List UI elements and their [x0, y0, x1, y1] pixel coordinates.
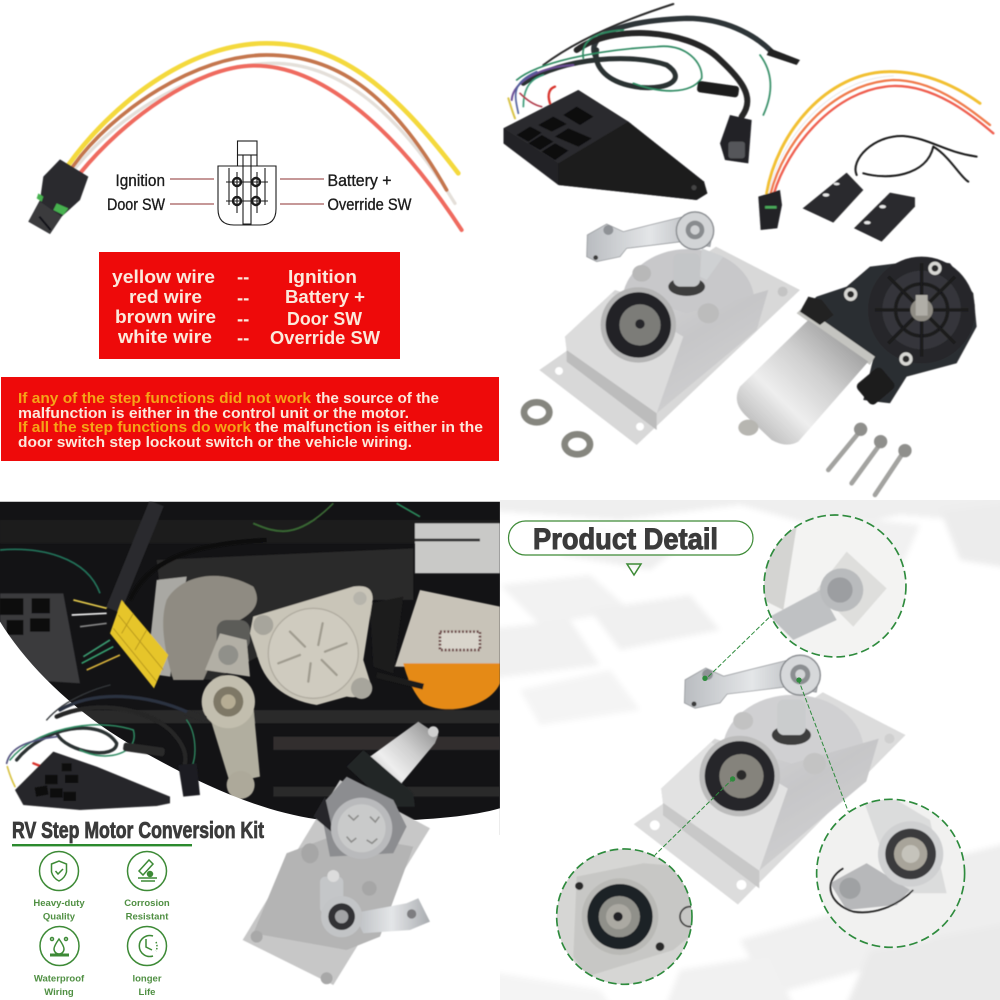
reed sensor wires	[855, 136, 977, 182]
panel: wire colour table	[99, 252, 400, 359]
control unit	[503, 90, 707, 200]
panel: wire colour table: Door SW	[287, 308, 363, 329]
panel: wire colour table: yellow wire	[112, 266, 215, 287]
title: RV Step Motor Conversion Kit: RV Step Motor Conversion Kit	[12, 817, 264, 843]
label: Corrosion Resistant: Corrosion	[124, 898, 170, 909]
callout dots	[702, 676, 802, 782]
gearbox	[539, 212, 800, 445]
panel: installed photo	[0, 502, 500, 1000]
panel: troubleshooting note: the source of the	[316, 390, 439, 407]
icon: clock	[128, 926, 166, 966]
panel: product detail	[480, 480, 1000, 1000]
white curved foreground	[0, 622, 500, 835]
reed sensors	[803, 173, 863, 223]
panel: troubleshooting note: malfunction is either in the control unit or the motor.	[18, 405, 409, 422]
pigtail small	[767, 72, 993, 193]
label: Heavy-duty Quality: Heavy-duty	[33, 898, 85, 909]
panel: wire colour table: Override SW	[270, 327, 381, 348]
panel: troubleshooting note: door switch step lockout switch or the vehicle wiring.	[18, 434, 412, 451]
heading pill	[508, 521, 753, 556]
callout line: lever end	[708, 617, 770, 677]
bolts	[828, 433, 902, 495]
panel: troubleshooting note	[1, 377, 499, 461]
pin labels: Override SW	[328, 196, 412, 214]
coloured wires	[0, 503, 420, 670]
label: Heavy-duty Quality	[33, 898, 85, 922]
detail circle: lever end	[763, 515, 906, 657]
label: Corrosion Resistant	[124, 898, 170, 922]
mosaic background	[480, 480, 1000, 1000]
motor	[737, 257, 977, 445]
gearbox centre photo	[634, 655, 905, 904]
icon: down triangle	[627, 564, 641, 575]
yellow tag	[110, 600, 168, 688]
harness wires	[508, 4, 772, 118]
gear cap	[250, 586, 373, 705]
detail circle: bearing	[817, 799, 965, 947]
panel: wire colour table: --	[237, 327, 249, 348]
lever arm	[587, 213, 713, 262]
connectors	[767, 48, 800, 65]
control box in photo	[0, 593, 80, 683]
panel: wire colour table: --	[237, 308, 249, 329]
label: Waterproof Wiring	[34, 974, 85, 998]
panel: troubleshooting note: If any of the step functions did not work	[18, 390, 312, 407]
heading: Product Detail: Product Detail	[533, 523, 718, 556]
panel: wire colour table: --	[237, 266, 249, 287]
pin labels: Door SW	[107, 196, 165, 214]
pin labels: Battery +	[328, 172, 392, 190]
lever in photo	[217, 620, 250, 650]
label: Waterproof Wiring: Wiring	[44, 987, 74, 998]
callout line: bearing	[798, 679, 848, 812]
panel: wire colour table: red wire	[129, 286, 202, 307]
icon: corrosion	[128, 852, 166, 890]
label: longer Life	[132, 974, 162, 998]
panel: wire colour table: Battery +	[285, 286, 365, 307]
icon: shield	[40, 852, 78, 890]
panel: wiring diagram	[28, 43, 462, 234]
label: Waterproof Wiring: Waterproof	[34, 974, 85, 984]
label: longer Life: Life	[139, 987, 155, 998]
washers	[524, 402, 590, 454]
label: longer Life: longer	[132, 974, 162, 984]
diagram: connector pinout	[218, 141, 276, 225]
panel: troubleshooting note: the malfunction is either in the	[255, 419, 483, 436]
feature icons	[33, 852, 170, 998]
icon: water drop	[40, 926, 79, 966]
icon: connector	[28, 159, 88, 234]
callout line: output shaft	[655, 778, 733, 855]
label: Corrosion Resistant: Resistant	[126, 912, 169, 922]
label: Heavy-duty Quality: Quality	[43, 912, 76, 922]
title underline	[12, 844, 192, 846]
panel: wire colour table: brown wire	[115, 306, 216, 327]
detail circle: output shaft	[557, 849, 700, 984]
panel: wire colour table: --	[237, 287, 249, 308]
panel: wire colour table: white wire	[117, 326, 212, 347]
pigtail wires	[68, 43, 462, 230]
white motor in photo	[395, 590, 500, 668]
pin labels	[107, 172, 412, 214]
pin labels: Ignition	[116, 172, 165, 190]
panel: kit contents photo	[503, 4, 993, 495]
inverted gearbox and motor	[243, 722, 439, 985]
panel: troubleshooting note: If all the step functions do work	[18, 419, 252, 436]
control box harness on white	[7, 685, 207, 810]
leader lines	[170, 179, 324, 204]
panel: wire colour table: Ignition	[288, 266, 357, 287]
